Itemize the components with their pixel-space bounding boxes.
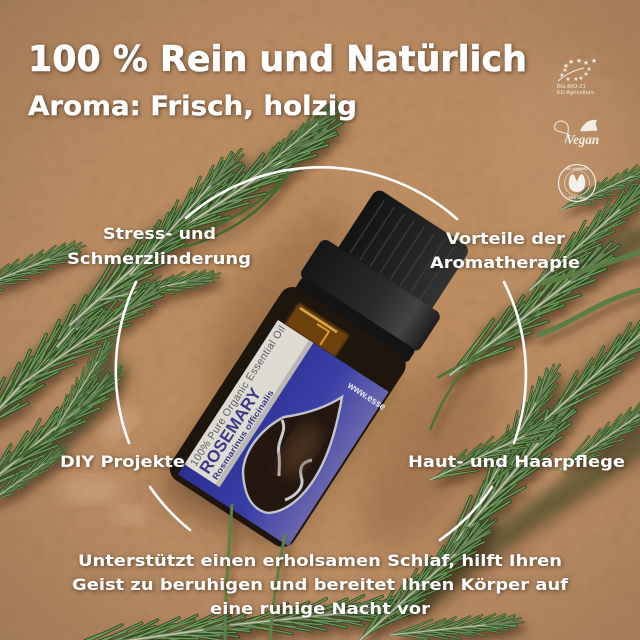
label: Stress- und Schmerzlinderung	[67, 224, 251, 268]
bottle label: Rosmarinus officinalis	[210, 388, 276, 482]
label: Vorteile der Aromatherapie: Vorteile der	[446, 229, 565, 248]
icon: EU organic leaf: ★	[578, 75, 584, 82]
bottle label: ROSEMARY	[196, 384, 265, 477]
sprig tips over bottle	[225, 505, 285, 640]
icon: EU organic leaf: EU Agriculture	[557, 90, 594, 96]
icon: oil drop	[243, 397, 342, 513]
rosemary sprig: right	[420, 155, 640, 600]
icon: EU organic leaf	[557, 57, 597, 96]
description text	[72, 551, 569, 618]
label: Vorteile der Aromatherapie	[430, 229, 580, 272]
bottle shadow	[158, 312, 398, 547]
description text: eine ruhige Nacht vor	[210, 599, 430, 618]
bottle label	[178, 320, 389, 546]
rosemary sprig: bottom	[58, 509, 525, 640]
bottle glass	[164, 282, 411, 552]
icon: EU organic leaf: ★	[573, 76, 579, 83]
bottle	[158, 175, 481, 553]
description text: Unterstützt einen erholsamen Schlaf, hilft Ihren	[78, 551, 562, 570]
icon: EU organic leaf: ★	[591, 57, 597, 65]
description text: Geist zu beruhigen und bereitet Ihren Körper auf	[72, 575, 569, 594]
icon: EU organic leaf: ★	[568, 58, 574, 66]
icon: EU organic leaf: BG-BIO-21	[557, 84, 586, 90]
label website text: www.esse	[345, 380, 388, 413]
label: Vorteile der Aromatherapie: Aromatherapie	[430, 253, 580, 272]
icon: EU organic leaf: ★	[586, 66, 592, 73]
icon: EU organic leaf: ★	[565, 76, 571, 83]
rosemary sprig: upper left	[0, 93, 352, 512]
icon: no animal testing: NO ANIMAL	[566, 166, 589, 171]
icon: EU organic leaf: ★	[559, 72, 565, 79]
icon: EU organic leaf: ★	[562, 67, 568, 74]
icon: EU organic leaf: ★	[583, 71, 589, 78]
icon: EU organic leaf: ★	[583, 59, 589, 67]
label: DIY Projekte: DIY Projekte	[60, 452, 185, 471]
icon: EU organic leaf: ★	[563, 62, 569, 70]
icon: EU organic leaf: ★	[576, 57, 582, 65]
title: 100 % Rein und Natürlich	[28, 39, 527, 80]
label: Stress- und Schmerzlinderung: Schmerzlinderung	[67, 249, 251, 268]
label: Stress- und Schmerzlinderung: Stress- und	[103, 224, 216, 243]
label: Haut- und Haarpflege: Haut- und Haarpflege	[408, 452, 625, 471]
icon: no animal testing: TESTING	[568, 195, 586, 200]
subtitle: aroma: Aroma: Frisch, holzig	[28, 91, 357, 122]
icon: vegan: Vegan	[566, 132, 599, 147]
icon: no animal testing	[558, 164, 596, 202]
bottle cap	[291, 178, 481, 365]
icon: vegan	[555, 120, 599, 147]
bottle label: 100% Pure Organic Essential Oil	[188, 324, 288, 469]
circular arc segments	[116, 167, 526, 540]
